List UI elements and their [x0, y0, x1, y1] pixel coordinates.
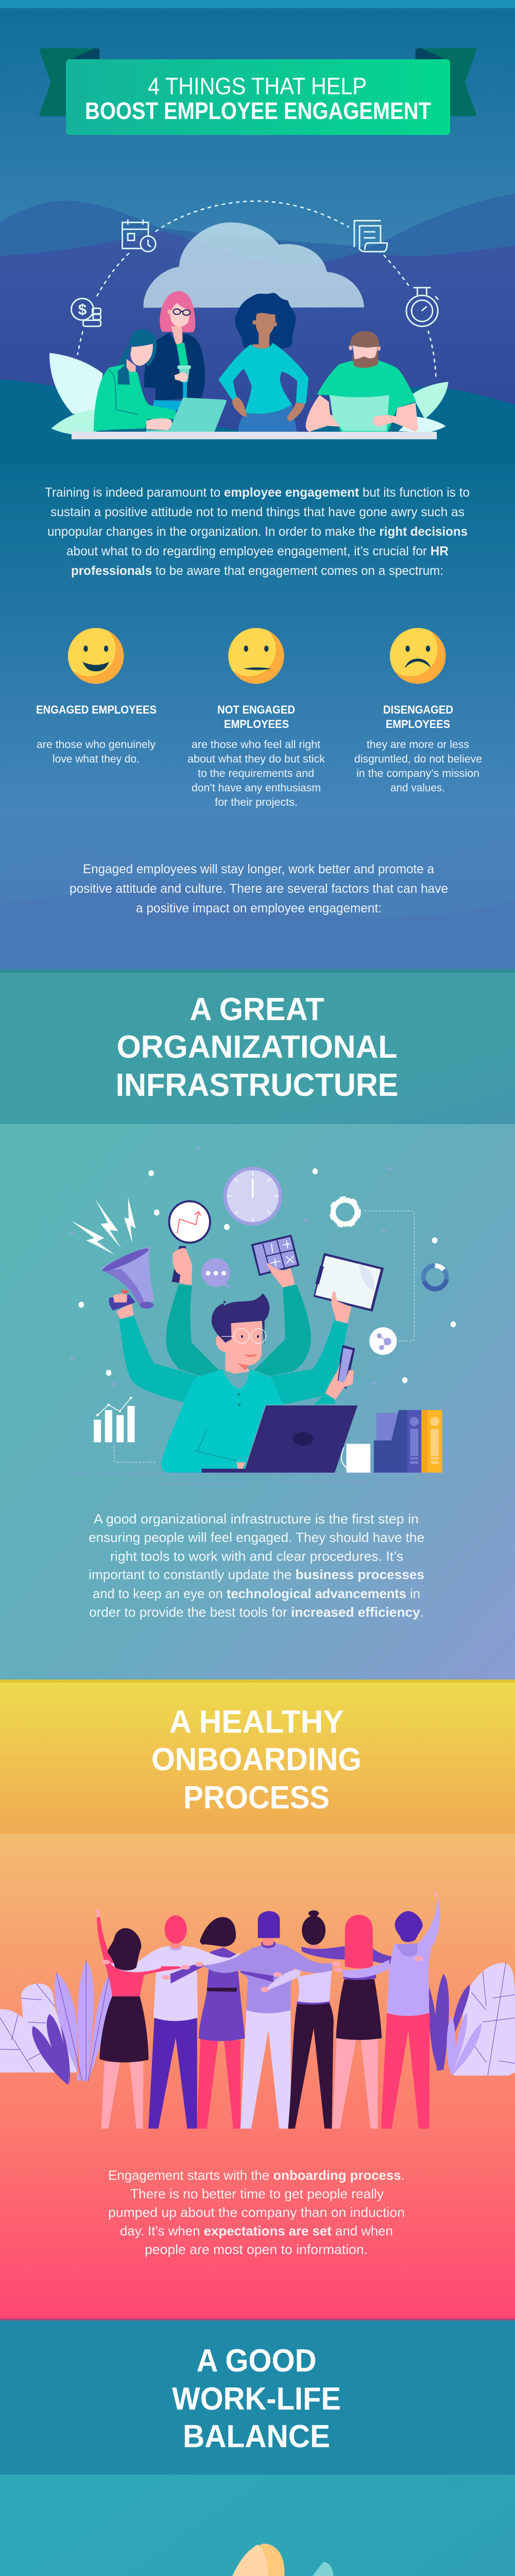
- icons: emoji faces: [68, 628, 445, 684]
- person 4: [240, 1911, 294, 2129]
- column: disengaged employees: [354, 703, 482, 794]
- icon: dollar coin in hand: $: [78, 301, 87, 318]
- floating dots: [78, 1168, 456, 1383]
- text: closing intro paragraph: positive attitude and culture. There are several factors that can have: [70, 882, 448, 896]
- text: onboarding body: Engagement starts with the onboarding process.: [108, 2167, 405, 2183]
- column: engaged employees: ENGAGED EMPLOYEES: [36, 703, 157, 716]
- icon: clipboard: [314, 1253, 384, 1323]
- table: [72, 432, 437, 439]
- leaves: [49, 353, 449, 436]
- person 3: [170, 1917, 245, 2129]
- cloud: [144, 223, 364, 308]
- panel: intro background: [0, 0, 515, 970]
- plants left: [0, 1961, 112, 2084]
- text: infrastructure body: and to keep an eye on technological advancements in: [93, 1586, 420, 1601]
- text: infrastructure body: important to constantly update the business processes: [89, 1567, 424, 1582]
- heading: [151, 1704, 362, 1816]
- column: not engaged employees: EMPLOYEES: [224, 718, 289, 731]
- text: intro paragraph: Training is indeed paramount to employee engagement but its function is to: [45, 485, 470, 500]
- illustration: hills backdrop: [0, 194, 515, 464]
- column: not engaged employees: are those who feel all right: [192, 739, 320, 751]
- illustration: icons arc: [78, 201, 436, 377]
- text: intro paragraph: about what to do regarding employee engagement, it’s crucial for HR: [66, 544, 449, 558]
- text: intro paragraph: unpopular changes in the organization. In order to make the right decisions: [47, 524, 468, 539]
- text: intro paragraph: professionals to be aware that engagement comes on a spectrum:: [71, 564, 443, 578]
- heading: BALANCE: [183, 2419, 330, 2454]
- icon: phone in hand: [314, 1345, 355, 1405]
- heading: A GREAT: [190, 992, 324, 1027]
- icon: magnifier with chart: [169, 1201, 210, 1285]
- icon: stopwatch: [406, 287, 438, 326]
- column: not engaged employees: [187, 703, 325, 808]
- person: bearded man with paper: [306, 331, 418, 432]
- icon: calendar: [122, 219, 156, 251]
- icon: binders: [374, 1410, 442, 1472]
- person 6: [332, 1948, 416, 2129]
- text: intro paragraph: [45, 485, 470, 578]
- heading: A HEALTHY: [169, 1704, 344, 1740]
- heading: A GOOD: [197, 2343, 316, 2379]
- column: disengaged employees: DISENGAGED: [383, 703, 453, 716]
- icon: speech bubble: [201, 1258, 230, 1289]
- column: not engaged employees: about what they do but stick: [187, 753, 325, 765]
- column: disengaged employees: and values.: [390, 782, 445, 794]
- back arms: [166, 1284, 311, 1376]
- linked arms: [101, 1915, 423, 1992]
- column: not engaged employees: NOT ENGAGED: [217, 703, 295, 716]
- plants right: [428, 1963, 515, 2076]
- text: closing intro paragraph: a positive impact on employee engagement:: [136, 901, 382, 916]
- person: woman with curly hair: [218, 293, 308, 432]
- panel: onboarding process: [0, 1680, 515, 2320]
- icon: wall clock: [224, 1167, 282, 1226]
- icon: document scroll: [354, 221, 387, 251]
- text: onboarding body: There is no better time to get people really: [130, 2186, 384, 2201]
- text: infrastructure body: A good organizational infrastructure is the first step in: [94, 1511, 419, 1527]
- ribbon tails: [39, 48, 476, 116]
- text: infrastructure body: order to provide the best tools for increased efficiency.: [89, 1604, 424, 1620]
- plant leaves: [214, 2544, 394, 2576]
- heading: WORK-LIFE: [172, 2381, 341, 2417]
- heading: INFRASTRUCTURE: [115, 1067, 399, 1103]
- column: not engaged employees: don’t have any enthusiasm: [192, 782, 321, 794]
- illustration: multitasking man: [70, 1146, 456, 1484]
- icon: bar chart: [94, 1397, 157, 1462]
- icon: laptop: [201, 1405, 357, 1472]
- text: infrastructure body: right tools to work with and clear procedures. It’s: [110, 1549, 403, 1564]
- icon: donut chart: [423, 1266, 447, 1289]
- icon: mug: [341, 1444, 370, 1472]
- column: engaged employees: [36, 703, 157, 765]
- title text: 4 THINGS THAT HELP: [148, 73, 367, 99]
- icon: neutral face: [228, 628, 284, 684]
- person 5: [268, 1910, 345, 2129]
- column: disengaged employees: disgruntled, do not believe: [354, 753, 482, 765]
- icon: dollar coin in hand: [71, 298, 101, 326]
- icon: calculator: [251, 1234, 299, 1287]
- column: not engaged employees: for their projects.: [215, 796, 298, 808]
- heading: ORGANIZATIONAL: [116, 1029, 398, 1065]
- panel: work-life balance: [0, 2318, 515, 2576]
- column: disengaged employees: in the company’s mission: [356, 768, 479, 779]
- text: closing intro paragraph: [70, 862, 448, 916]
- person 2: [148, 1916, 198, 2129]
- text: onboarding body: people are most open to information.: [145, 2242, 368, 2257]
- illustration: team with cloud: [49, 223, 449, 439]
- heading: ONBOARDING: [151, 1742, 362, 1777]
- person: pink hair woman: [144, 291, 205, 412]
- text: infrastructure body: [89, 1511, 424, 1620]
- heading: PROCESS: [183, 1780, 330, 1816]
- illustration: group of colleagues: [0, 1888, 515, 2129]
- icon: megaphone: [100, 1246, 154, 1319]
- column: disengaged employees: EMPLOYEES: [386, 718, 450, 731]
- text: onboarding body: day. It’s when expectations are set and when: [120, 2223, 393, 2239]
- icon: happy face: [68, 628, 124, 684]
- icon: network node: [369, 1327, 397, 1355]
- person: man with glasses: [161, 1293, 283, 1472]
- person 1: [96, 1909, 148, 2129]
- text: intro paragraph: sustain a positive attitude not to mend things that have gone awry such as: [50, 505, 465, 519]
- column: engaged employees: love what they do.: [53, 753, 140, 765]
- front arms: [119, 1316, 348, 1405]
- title banner: [39, 48, 476, 135]
- person: seated woman teal hair: [94, 329, 227, 432]
- person 7: [341, 1888, 440, 2129]
- icon: gear with connector: [331, 1198, 414, 1341]
- text: onboarding body: pumped up about the company than on induction: [108, 2205, 405, 2220]
- panel: organizational infrastructure: [0, 969, 515, 1680]
- icon: sad face: [390, 628, 445, 684]
- text: closing intro paragraph: Engaged employees will stay longer, work better and promote a: [83, 862, 434, 876]
- text: infrastructure body: ensuring people will feel engaged. They should have the: [89, 1530, 424, 1545]
- illustration: yoga woman: [0, 2544, 515, 2576]
- icon: lightning bolts: [71, 1197, 135, 1255]
- text: onboarding body: [108, 2167, 405, 2257]
- column: not engaged employees: to the requirements and: [198, 768, 314, 779]
- column: engaged employees: are those who genuinely: [37, 739, 156, 751]
- title banner: BOOST EMPLOYEE ENGAGEMENT: [85, 97, 431, 124]
- heading: [172, 2343, 341, 2454]
- heading: [115, 992, 399, 1103]
- column: disengaged employees: they are more or less: [367, 739, 469, 751]
